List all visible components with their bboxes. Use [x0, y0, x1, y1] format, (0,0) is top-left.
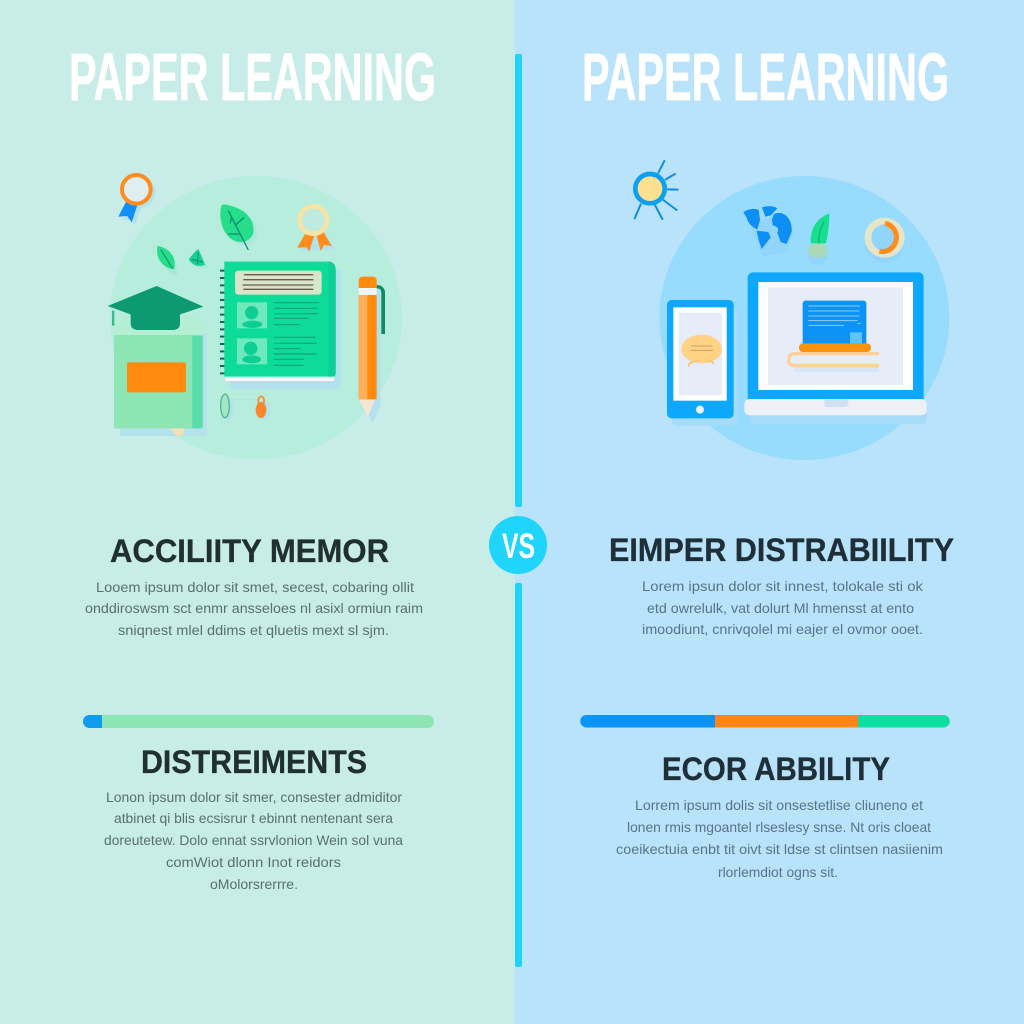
- icon: laptop: [744, 272, 927, 424]
- text block: left two: [104, 789, 403, 892]
- icon: large leaf: [220, 204, 257, 250]
- icon: medal: [297, 206, 335, 252]
- icon: globe: [743, 206, 793, 257]
- text block: left two: doreutetew. Dolo ennat ssrvlonion Wein sol vuna: [104, 832, 403, 848]
- heading: right one: EIMPER DISTRABIILITY: [609, 532, 954, 568]
- icon: small leaf: [157, 246, 177, 277]
- text block: left two: comWiot dlonn Inot reidors: [166, 854, 341, 870]
- panel: left background: [0, 0, 515, 1024]
- text block: right two: lonen rmis mgoantel rlseslesy snse. Nt oris cloeat: [627, 819, 931, 835]
- panel: right background: [515, 0, 1024, 1024]
- icon: pencil: [359, 277, 385, 423]
- text block: left one: onddiroswsm sct enmr ansseloes nl asixl ormiun raim: [85, 600, 423, 616]
- illustration: digital learning: [635, 161, 949, 460]
- icon: book with graduation cap: [108, 286, 207, 436]
- text block: right one: [642, 578, 924, 637]
- book on screen: [789, 301, 879, 372]
- heading: left two: DISTREIMENTS: [141, 744, 367, 780]
- text block: right two: rlorlemdiot ogns sit.: [718, 864, 838, 880]
- icon: small leaf bud: [189, 249, 208, 269]
- icon: plant: [808, 213, 829, 265]
- text block: right one: imoodiunt, cnrivqolel mi eajer el ovmor ooet.: [642, 621, 923, 637]
- text block: left one: Looem ipsum dolor sit smet, secest, cobaring ollit: [96, 579, 414, 595]
- text block: left two: Lonon ipsum dolor sit smer, consester admiditor: [106, 789, 402, 805]
- bar: right: [580, 715, 950, 728]
- icon: lock: [232, 396, 270, 420]
- text block: left two: oMolorsrerrre.: [210, 876, 298, 892]
- text block: left two: atbinet qi blis ecsisrur t ebinnt nentenant sera: [114, 810, 393, 826]
- icon: phone: [667, 300, 738, 426]
- icon: donut chart: [865, 221, 905, 263]
- text block: right two: [616, 797, 943, 880]
- heading: left one: ACCILIITY MEMOR: [110, 533, 389, 569]
- title: left: PAPER LEARNING: [69, 40, 436, 115]
- bar: left: [83, 715, 434, 728]
- divider: lower line: [515, 583, 522, 967]
- icon: sun: [635, 161, 678, 219]
- badge: VS: VS: [502, 527, 535, 566]
- text block: right one: etd owrelulk, vat dolurt Ml hmensst at ento: [647, 600, 914, 616]
- icon: paper clip: [221, 394, 233, 420]
- divider: upper line: [515, 54, 522, 507]
- text block: left one: [85, 579, 423, 638]
- text block: right one: Lorem ipsun dolor sit innest, tolokale sti ok: [642, 578, 924, 594]
- text block: right two: coeikectuia enbt tit oivt sit ldse st clintsen nasiienim: [616, 841, 943, 857]
- background circle: [659, 176, 949, 460]
- heading: right two: ECOR ABBILITY: [662, 751, 890, 787]
- text block: left one: sniqnest mlel ddims et qluetis mext sl sjm.: [118, 622, 389, 638]
- text block: right two: Lorrem ipsum dolis sit onsestetlise cliuneno et: [635, 797, 923, 813]
- background circle: [110, 176, 402, 459]
- icon: notebook: [220, 262, 341, 389]
- badge: VS: [489, 516, 547, 574]
- icon: ribbon badge: [118, 175, 155, 225]
- illustration: paper learning: [108, 175, 402, 459]
